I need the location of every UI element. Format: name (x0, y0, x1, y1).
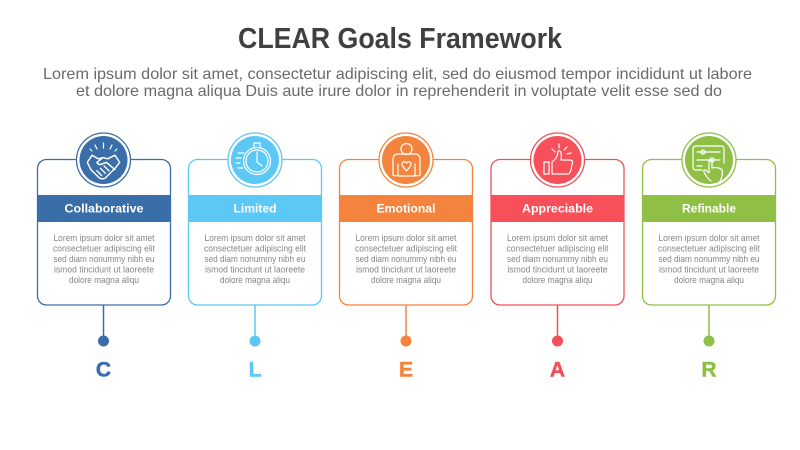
subtitle (43, 66, 752, 100)
body text (658, 233, 760, 285)
card outline (642, 160, 776, 305)
body text: sed diam nonummy nibh eu (507, 254, 608, 264)
icon: stopwatch (228, 133, 282, 187)
connector (552, 305, 563, 346)
panel: Emotional (339, 133, 473, 382)
panel: Refinable (642, 133, 776, 382)
heading band: Limited (234, 204, 276, 216)
body text: sed diam nonummy nibh eu (356, 254, 456, 264)
body text: dolore magna aliqu (674, 275, 744, 285)
body text: ismod tincidunt ut laoreete (508, 264, 608, 274)
body text: ismod tincidunt ut laoreete (356, 264, 456, 274)
card outline (188, 160, 322, 305)
body text (355, 233, 457, 285)
card outline (38, 160, 170, 305)
heading band (339, 195, 473, 222)
body text (53, 233, 155, 285)
body text: consectetuer adipiscing elit (355, 244, 457, 254)
heading band: Appreciable (522, 204, 593, 216)
body text: sed diam nonummy nibh eu (658, 254, 760, 264)
card outline (340, 160, 472, 305)
body text: dolore magna aliqu (220, 275, 290, 285)
body text: consectetuer adipiscing elit (658, 244, 760, 254)
heading band: Refinable (682, 204, 736, 216)
panel: Limited (188, 133, 322, 382)
panel: Appreciable (490, 133, 624, 382)
heading band (642, 195, 776, 222)
subtitle: Lorem ipsum dolor sit amet, consectetur adipiscing elit, sed do eiusmod tempor incididunt ut labore (43, 66, 752, 83)
body text: ismod tincidunt ut laoreete (54, 264, 154, 274)
heading band (490, 195, 624, 222)
body text: dolore magna aliqu (371, 275, 441, 285)
body text (506, 233, 609, 285)
body text: consectetuer adipiscing elit (204, 244, 306, 254)
card outline (491, 160, 624, 305)
body text: ismod tincidunt ut laoreete (659, 264, 759, 274)
body text: sed diam nonummy nibh eu (54, 254, 154, 264)
body text: Lorem ipsum dolor sit amet (658, 233, 760, 243)
letter C: C (96, 358, 111, 382)
body text: Lorem ipsum dolor sit amet (507, 233, 608, 243)
body text: ismod tincidunt ut laoreete (205, 264, 305, 274)
body text: consectetuer adipiscing elit (506, 244, 609, 254)
letter R: R (701, 358, 717, 382)
body text: Lorem ipsum dolor sit amet (356, 233, 457, 243)
connector (250, 305, 260, 346)
subtitle: et dolore magna aliqua Duis aute irure dolor in reprehenderit in voluptate velit esse sed do (76, 83, 722, 100)
body text: Lorem ipsum dolor sit amet (204, 233, 306, 243)
connector (98, 305, 109, 346)
panel: Collaborative (37, 133, 171, 382)
body text: consectetuer adipiscing elit (53, 244, 155, 254)
title: CLEAR Goals Framework (238, 23, 563, 55)
icon: person with heart (379, 133, 433, 187)
body text: sed diam nonummy nibh eu (204, 254, 306, 264)
body text: dolore magna aliqu (69, 275, 139, 285)
body text: dolore magna aliqu (522, 275, 592, 285)
heading band (188, 195, 322, 222)
body text (204, 233, 306, 285)
letter L: L (249, 358, 262, 382)
letter A: A (550, 358, 565, 382)
heading band (37, 195, 171, 222)
connector (704, 305, 714, 346)
connector (400, 305, 412, 346)
icon: handshake (76, 133, 130, 187)
body text: Lorem ipsum dolor sit amet (54, 233, 155, 243)
letter E: E (399, 358, 413, 382)
heading band: Emotional (376, 204, 436, 216)
icon: thumbs up (530, 133, 584, 187)
heading band: Collaborative (64, 204, 144, 216)
icon: sliders with hand (682, 133, 736, 187)
